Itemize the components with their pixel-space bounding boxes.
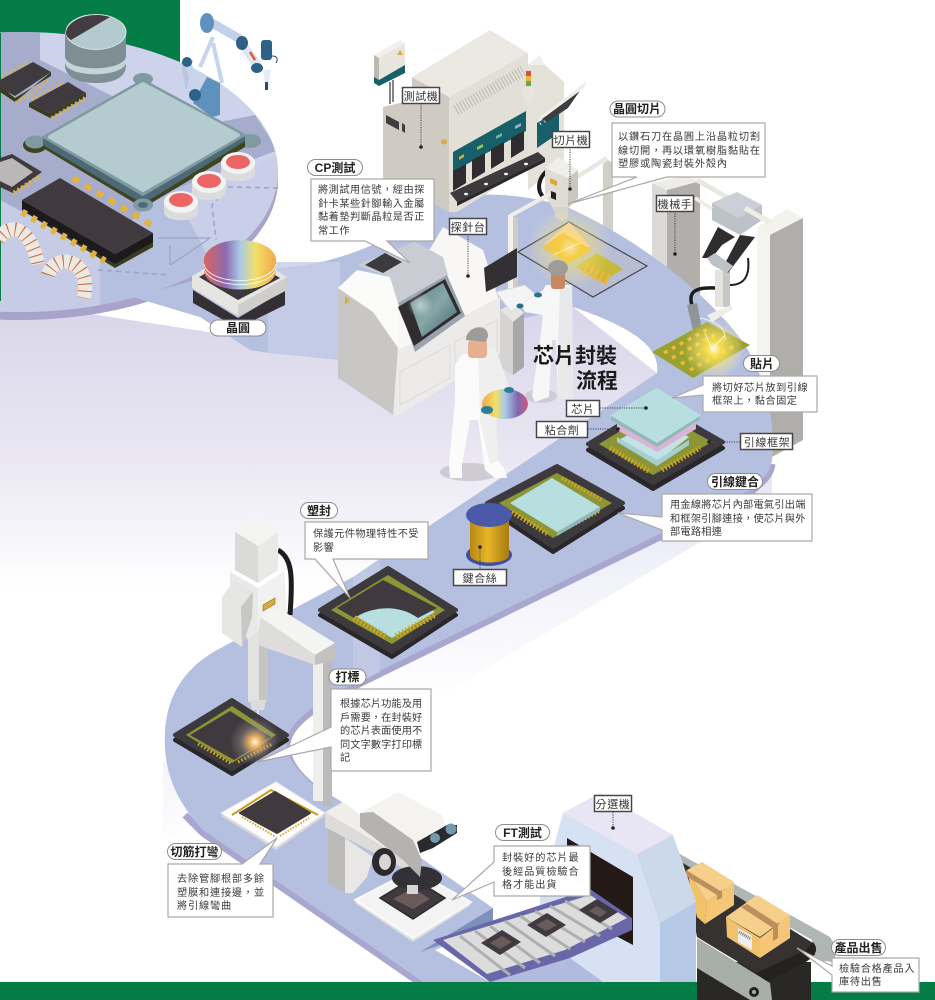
callout: product sale: 檢驗合格產品入 bbox=[839, 962, 915, 975]
label: chip: 芯片 bbox=[571, 403, 595, 416]
monitor and pedestal bbox=[484, 248, 536, 375]
green footer band bbox=[0, 982, 935, 1000]
label: tester bbox=[402, 88, 440, 149]
callout: wafer dicing: 線切開，再以環氧樹脂黏貼在 bbox=[618, 144, 761, 157]
label: tester: 測試機 bbox=[404, 89, 438, 103]
green header block bbox=[0, 0, 180, 100]
callout: trim and form: 塑膜和連接邊，並 bbox=[177, 886, 265, 899]
label: lead frame: 引線框架 bbox=[744, 435, 790, 449]
conveyor band shadow edges bbox=[185, 464, 772, 985]
tester machine bbox=[383, 30, 586, 212]
callout: die attach bbox=[672, 376, 817, 412]
callout: CP test: 常工作 bbox=[318, 224, 350, 237]
callout: molding: 保護元件物理特性不受 bbox=[313, 527, 419, 540]
callout: marking: 戶需要，在封裝好 bbox=[340, 711, 422, 724]
heading pill: FT test: FT測試 bbox=[503, 825, 542, 840]
pale side of middle conveyor bbox=[367, 465, 772, 720]
callout: wire bonding: 和框架引腳連接，使芯片與外 bbox=[670, 512, 806, 525]
label: robot hand: 機械手 bbox=[658, 197, 692, 211]
heading pill: FT test bbox=[496, 824, 550, 840]
heading pill: die attach: 貼片 bbox=[750, 356, 774, 371]
label: chip bbox=[566, 400, 648, 416]
heading pill: die attach bbox=[744, 356, 780, 372]
heading pill: CP test: CP測試 bbox=[315, 160, 355, 175]
worker at keyboard bbox=[516, 260, 573, 403]
icon: small chips bbox=[0, 62, 86, 118]
label: bonding wire: 鍵合絲 bbox=[463, 571, 497, 585]
worker with wafer bbox=[440, 327, 528, 481]
molded chip bbox=[320, 568, 456, 657]
callout: CP test: 將測試用信號，經由探 bbox=[318, 183, 425, 196]
callout: wafer dicing: 塑膠或陶瓷封裝外殼內 bbox=[618, 157, 728, 170]
label: prober: 探針台 bbox=[451, 220, 485, 234]
callout: molding bbox=[305, 522, 428, 598]
heading pill: trim and form: 切筋打彎 bbox=[170, 844, 219, 859]
cardboard box rear bbox=[686, 862, 734, 924]
label: sorter bbox=[594, 796, 632, 830]
shipping belt bbox=[678, 853, 838, 1000]
label: dicing machine bbox=[552, 132, 590, 191]
pale side of lower conveyor bbox=[163, 760, 423, 982]
rail and far post of dicing machine bbox=[513, 158, 613, 235]
dicing head bbox=[508, 157, 578, 292]
label: prober bbox=[450, 218, 486, 278]
conveyor band bbox=[133, 195, 773, 982]
callout: marking: 根據芯片功能及用 bbox=[340, 697, 422, 710]
callout: marking: 同文字數字打印標 bbox=[340, 738, 422, 751]
cardboard box front bbox=[726, 895, 790, 958]
callout: trim and form: 將引線彎曲 bbox=[177, 899, 232, 912]
callout: wire bonding: 用金線將芯片內部電氣引出端 bbox=[670, 498, 806, 511]
label: lead frame bbox=[707, 434, 792, 450]
title bbox=[533, 345, 618, 393]
callout: product sale bbox=[797, 948, 919, 992]
heading pill: marking bbox=[329, 669, 366, 685]
icon: DIP chip bbox=[22, 178, 153, 268]
callout: molding: 影響 bbox=[313, 541, 334, 554]
heading pill: wire bonding: 引線鍵合 bbox=[711, 474, 759, 489]
heading pill: product sale: 產品出售 bbox=[834, 940, 883, 955]
label: robot hand bbox=[656, 196, 694, 256]
icon: bonding wire spool bbox=[466, 503, 512, 566]
sorter machine bbox=[490, 793, 696, 982]
callout: FT test: 封裝好的芯片最 bbox=[502, 851, 580, 864]
laser marking gantry bbox=[222, 518, 335, 806]
pale lavender floor bbox=[0, 300, 657, 650]
wire-bonded chip bbox=[487, 466, 623, 552]
callout: marking bbox=[257, 689, 431, 771]
icon: quad chip bbox=[0, 154, 42, 193]
label: bonding wire bbox=[454, 545, 506, 586]
heading pill: molding bbox=[300, 502, 338, 518]
callout: FT test: 格才能出貨 bbox=[502, 878, 557, 891]
icon: robot arm bbox=[181, 13, 277, 117]
chip under laser bbox=[175, 700, 287, 774]
callout: wire bonding: 部電路相連 bbox=[670, 525, 722, 538]
robot-hand support posts bbox=[652, 176, 803, 460]
title: 芯片封裝 bbox=[533, 345, 617, 368]
label: wafer bbox=[210, 320, 266, 336]
heading pill: wafer dicing: 晶圓切片 bbox=[613, 101, 661, 116]
callout: die attach: 將切好芯片放到引線 bbox=[712, 381, 808, 394]
callout: CP test: 針卡某些針腳輸入金屬 bbox=[318, 197, 425, 210]
callout: marking: 的芯片表面使用不 bbox=[340, 724, 422, 737]
heading pill: marking: 打標 bbox=[335, 669, 360, 684]
icon: large glass chip bbox=[23, 73, 261, 212]
callout: CP test bbox=[311, 179, 434, 263]
callout: wire bonding bbox=[618, 494, 812, 541]
label: sorter: 分選機 bbox=[596, 797, 630, 811]
callout: wafer dicing: 以鑽石刀在晶圓上沿晶粒切割 bbox=[618, 130, 761, 143]
icon: wafer on pedestal bbox=[192, 240, 287, 328]
dicing plate with wafer pieces bbox=[518, 206, 647, 297]
callout: FT test bbox=[452, 846, 590, 900]
label: adhesive: 粘合劑 bbox=[545, 423, 579, 437]
gold-pad board with glow bbox=[652, 318, 750, 379]
heading pill: CP test bbox=[308, 160, 362, 176]
roller conveyor with chips bbox=[433, 889, 632, 982]
icon: capacitor bbox=[65, 14, 126, 83]
callout: CP test: 黏着墊判斷晶粒是否正 bbox=[318, 210, 425, 223]
icon: wall control box bbox=[374, 40, 405, 86]
callout: marking: 記 bbox=[340, 751, 350, 764]
green left edge bbox=[0, 33, 1, 301]
platform disc bbox=[0, 32, 278, 320]
title: 流程 bbox=[576, 370, 618, 393]
label: wafer: 晶圓 bbox=[226, 321, 250, 335]
gripper robot bbox=[687, 192, 772, 343]
callout: trim and form: 去除管腳根部多餘 bbox=[177, 872, 265, 885]
label: adhesive bbox=[536, 422, 620, 438]
heading pill: molding: 塑封 bbox=[307, 503, 331, 518]
icon: coils bbox=[0, 229, 85, 298]
inspection microscope bbox=[325, 792, 457, 894]
callout: FT test: 後經品質檢驗合 bbox=[502, 865, 580, 878]
test stage bbox=[355, 870, 471, 942]
chip stack on lead frame bbox=[588, 389, 723, 489]
probing machine bbox=[338, 227, 500, 417]
callout: product sale: 庫待出售 bbox=[839, 975, 883, 988]
callout: trim and form bbox=[168, 838, 277, 917]
label: dicing machine: 切片機 bbox=[554, 133, 588, 147]
callout: wafer dicing bbox=[568, 123, 765, 204]
icon: red buttons bbox=[164, 152, 255, 220]
callout: die attach: 框架上，黏合固定 bbox=[712, 394, 798, 407]
trim and form chip bbox=[221, 782, 325, 850]
